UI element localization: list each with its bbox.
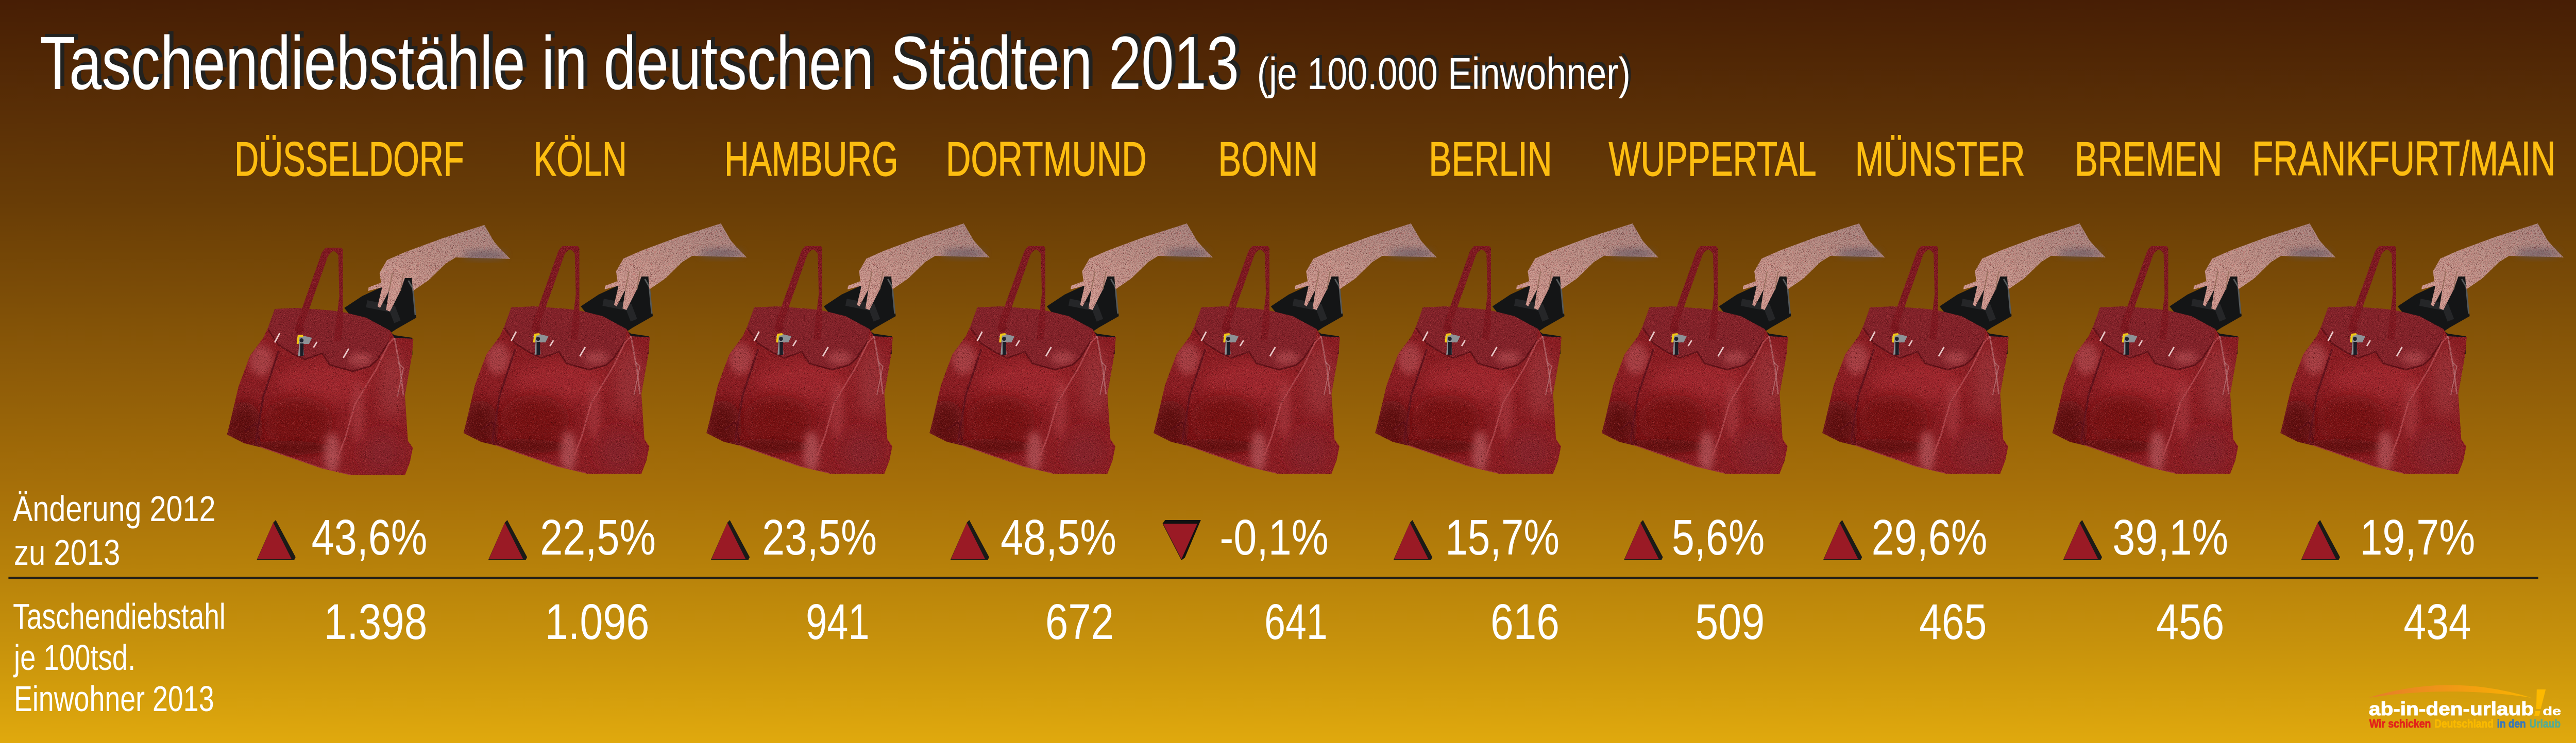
city: Berlin: BERLIN [1429,131,1552,186]
value: 29,6%: 29,6% [1872,510,1987,565]
value: 672: 672 [1045,594,1114,650]
row label: Änderung: Änderung 2012 [13,489,216,529]
row label: Änderung: zu 2013 [14,532,120,573]
icon: handbag Wuppertal [1599,223,1885,474]
value: 23,5%: 23,5% [762,510,877,565]
logo wordmark: ab-in-den-urlaub [2369,699,2534,719]
city: Wuppertal: WUPPERTAL [1608,131,1817,186]
title: Taschendiebstähle in deutschen Städten 2013 [40,21,1239,106]
logo tagline: in den [2497,717,2526,730]
value: 941: 941 [806,594,870,650]
logo swoosh [2369,685,2531,698]
icon: handbag Münster [1820,223,2106,474]
illustrations: handbags with hand stealing wallet [225,223,2564,475]
icon: handbag Berlin [1372,223,1658,474]
icon: handbag Hamburg [704,223,990,474]
trend up: Berlin [1394,520,1432,560]
trend up: Köln [488,520,527,560]
icon: handbag Bonn [1151,223,1437,474]
trend up: Hamburg [711,520,750,560]
icon: handbag Frankfurt/Main [2278,223,2564,474]
value: 48,5%: 48,5% [1001,510,1116,565]
row label: Taschendiebstahl: je 100tsd. [13,637,135,678]
value: 15,7%: 15,7% [1445,510,1560,565]
row label: Änderung [13,489,216,573]
trend up: Münster [1823,520,1862,560]
subtitle: (je 100.000 Einwohner) [1257,49,1631,99]
icon: handbag Köln [461,223,747,474]
value: 616: 616 [1490,594,1560,650]
theft count row [324,594,2471,650]
row label: Taschendiebstahl [13,596,226,719]
trend up: Wuppertal [1624,520,1663,560]
row label: Taschendiebstahl: Einwohner 2013 [14,679,214,719]
city: Bonn: BONN [1218,131,1318,186]
logo tagline [2369,717,2561,730]
icon: handbag Düsseldorf [225,225,510,475]
city headings [234,131,2555,186]
logo tagline: Deutschland [2434,717,2494,730]
logo tagline: Urlaub [2529,717,2561,730]
trend up: Düsseldorf [257,520,296,560]
value: 509: 509 [1695,594,1765,650]
logo domain: de [2543,705,2561,718]
value: 39,1%: 39,1% [2112,510,2228,565]
value: 1.398: 1.398 [324,594,427,650]
logo exclamation mark [2534,689,2546,716]
city: Münster: MÜNSTER [1855,131,2025,186]
trend up: Frankfurt/Main [2301,520,2340,560]
change row: triangles and percentages [257,510,2475,565]
value: 641: 641 [1264,594,1328,650]
city: Bremen: BREMEN [2075,131,2222,186]
icon: handbag Dortmund [927,223,1213,474]
trend up: Bremen [2063,520,2102,560]
value: 19,7%: 19,7% [2360,510,2475,565]
icon: handbag Bremen [2050,223,2335,474]
city: Hamburg: HAMBURG [724,131,898,186]
value: 456: 456 [2156,594,2224,650]
value: 5,6%: 5,6% [1672,510,1765,565]
value: 434: 434 [2403,594,2471,650]
logo tagline: Wir schicken [2369,717,2431,730]
trend up: Dortmund [951,520,989,560]
value: 465: 465 [1919,594,1987,650]
value: 43,6%: 43,6% [312,510,427,565]
city: Düsseldorf: DÜSSELDORF [234,131,464,186]
value: 22,5%: 22,5% [540,510,656,565]
city: Köln: KÖLN [534,131,627,186]
value: 1.096: 1.096 [545,594,649,650]
row label: Taschendiebstahl: Taschendiebstahl [13,596,226,636]
logo: ab-in-den-urlaub.de [2369,685,2561,730]
city: Dortmund: DORTMUND [946,131,1147,186]
value: -0,1%: -0,1% [1219,510,1329,565]
trend down: Bonn [1163,520,1201,560]
